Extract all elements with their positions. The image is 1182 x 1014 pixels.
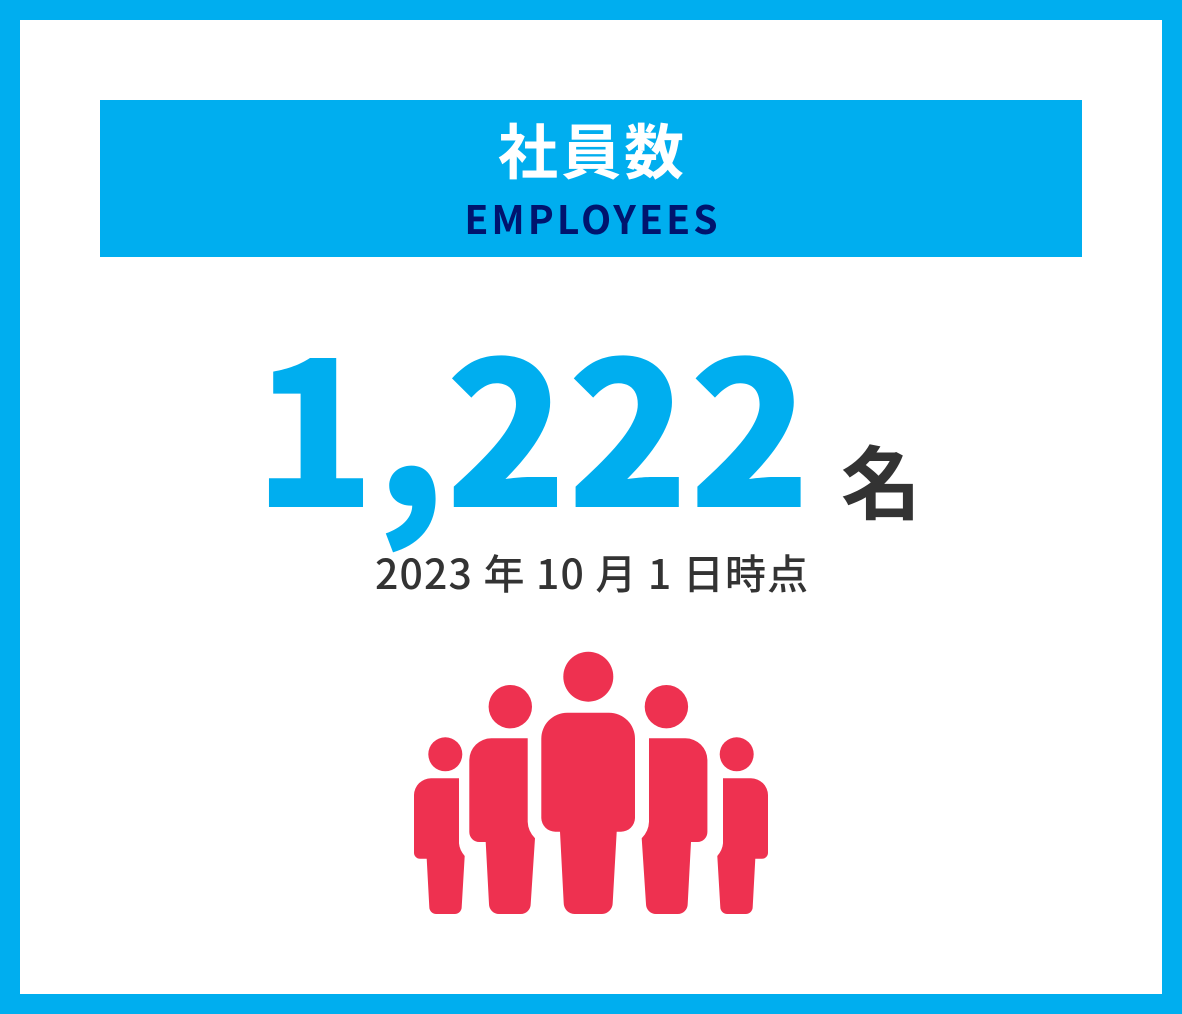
- key number: 1,222: 1,222: [253, 274, 811, 564]
- heading: Japanese title: 社員数: [498, 105, 687, 192]
- header banner: [100, 100, 1082, 257]
- icon: inner left person: [469, 685, 535, 914]
- icon: outer right person: [717, 737, 768, 914]
- icon: centre person: [541, 652, 635, 914]
- unit: 名: 名: [841, 420, 921, 536]
- icon: outer left person: [414, 737, 465, 914]
- icon: inner right person: [642, 685, 707, 914]
- date note: 2023 年 10 月 1 日時点: [375, 540, 809, 600]
- heading: English subtitle: EMPLOYEES: [464, 190, 721, 246]
